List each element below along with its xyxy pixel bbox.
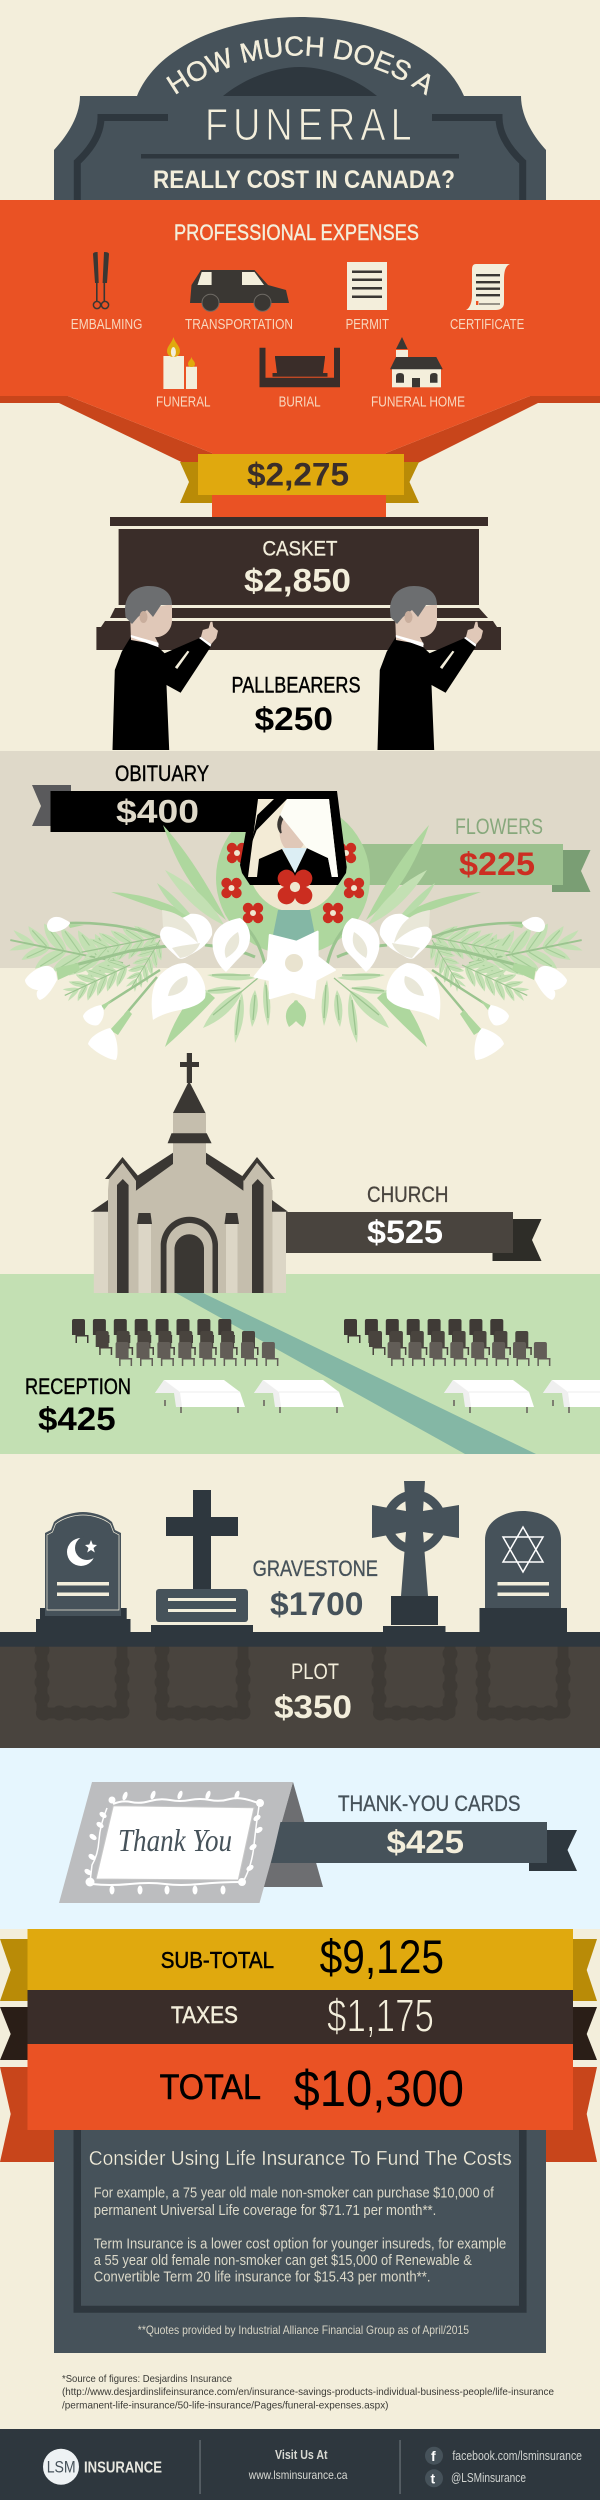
label: burial: BURIAL [279, 395, 321, 411]
side gables [105, 1157, 275, 1181]
band: total [28, 2044, 573, 2130]
paragraph: term insurance: a 55 year old female non-smoker can get $15,000 of Renewable & [94, 2253, 472, 2269]
ground [0, 1632, 600, 1647]
sign plaque [54, 17, 546, 200]
pallbearer left [112, 586, 218, 750]
paragraph: universal life: For example, a 75 year old male non-smoker can purchase $10,000 of [94, 2186, 495, 2202]
casket [96, 517, 501, 650]
label: sub-total: SUB-TOTAL [161, 1947, 274, 1973]
paragraph: term insurance: Term Insurance is a lower cost option for younger insureds, for example [94, 2236, 506, 2252]
icon: twitter: t [430, 2470, 436, 2486]
card inner panel [96, 1806, 254, 1880]
icon: candles [163, 337, 197, 389]
gravestone: star of david [480, 1511, 567, 1632]
icon: permit document [347, 262, 387, 310]
logo: LSM [47, 2458, 76, 2477]
banner body [0, 200, 600, 517]
portrait suit [257, 848, 332, 877]
ribbon: obituary [32, 761, 280, 832]
value: 2,275: $2,275 [247, 457, 349, 493]
icon: twitter [425, 2469, 443, 2487]
portrait background [248, 799, 338, 877]
bouquet left [6, 825, 306, 1060]
value: 525: $525 [367, 1214, 443, 1250]
slit windows [117, 1179, 264, 1293]
panel: thank-you cards [0, 1748, 600, 1929]
bouquet right [286, 825, 586, 1060]
tables [155, 1380, 600, 1413]
label: funeral: FUNERAL [156, 395, 210, 411]
card back [263, 1782, 323, 1887]
value: 2,850: $2,850 [244, 562, 351, 598]
heading: Consider Using Life Insurance To Fund The Costs [89, 2147, 512, 2170]
side wings [94, 1212, 108, 1293]
label: obituary: OBITUARY [115, 761, 209, 786]
portrait ribbon corner [252, 799, 287, 843]
title: how much does a: HOW MUCH DOES A [166, 36, 430, 96]
stand [271, 910, 317, 945]
red flowers upper [227, 843, 356, 863]
heading: professional expenses: PROFESSIONAL EXPENSES [174, 220, 419, 245]
title sign [54, 17, 546, 200]
portrait frame [240, 791, 347, 885]
panel: life insurance [54, 2130, 546, 2353]
plaque inner border [77, 118, 523, 200]
pallbearer right [378, 586, 483, 750]
label: reception: RECEPTION [25, 1374, 131, 1399]
visit us [248, 2447, 348, 2482]
paragraph: term insurance [94, 2236, 506, 2286]
wreath and portrait [32, 761, 370, 955]
panel: professional expenses banner [0, 200, 600, 517]
footer [0, 2429, 600, 2500]
icon: burial plot and casket [260, 348, 340, 387]
paragraph: term insurance: Convertible Term 20 life insurance for $15.43 per month**. [94, 2270, 431, 2286]
value: 1,175: $1,175 [327, 1990, 434, 2042]
path [176, 1293, 536, 1454]
paragraph: universal life [94, 2186, 495, 2219]
ribbon: professional total [180, 454, 419, 503]
label: permit: PERMIT [346, 317, 389, 333]
label: transportation: TRANSPORTATION [185, 317, 293, 333]
plaque inner arch [223, 67, 377, 96]
logo [43, 2449, 162, 2485]
church cross [180, 1053, 199, 1083]
band tails [0, 1939, 597, 2001]
label: plot: PLOT [291, 1659, 339, 1684]
quotes note: **Quotes provided by Industrial Alliance Financial Group as of April/2015 [138, 2323, 469, 2337]
source note: /permanent-life-insurance/50-life-insurance/Pages/funeral-expenses.aspx) [62, 2400, 388, 2412]
portrait veil [280, 799, 338, 877]
value: 425: $425 [386, 1824, 464, 1860]
church [91, 1053, 288, 1293]
label: pallbearers: PALLBEARERS [232, 673, 360, 698]
side columns [138, 1224, 151, 1293]
card flourishes [83, 1790, 264, 1894]
band: taxes [28, 1990, 573, 2044]
icon: funeral home [390, 337, 443, 387]
small red flowers [221, 878, 364, 923]
chairs right [344, 1319, 550, 1366]
ribbon: flowers [358, 814, 590, 892]
footer divider right [399, 2440, 401, 2494]
wreath inner [249, 820, 341, 912]
source note [62, 2373, 554, 2412]
value: 10,300: $10,300 [294, 2060, 464, 2117]
label: casket: CASKET [262, 538, 338, 561]
visit us: Visit Us At [275, 2447, 328, 2462]
dirt [0, 1646, 600, 1748]
icon: embalming scissors [93, 252, 109, 309]
band: sub-total [28, 1929, 573, 1990]
label: embalming: EMBALMING [71, 317, 142, 333]
label: thank-you cards: THANK-YOU CARDS [338, 1791, 520, 1816]
source note: (http://www.desjardinslifeinsurance.com/en/insurance-savings-products-individual-business-people/life-insurance [62, 2386, 554, 2398]
title: funeral: FUNERAL [205, 99, 412, 150]
label: taxes: TAXES [171, 2002, 238, 2029]
portrait hair [278, 815, 283, 833]
card front [59, 1782, 293, 1903]
gravestone: celtic cross [372, 1481, 459, 1632]
card script: thank you: Thank You [118, 1822, 232, 1858]
value: 400: $400 [116, 794, 199, 830]
portrait head [280, 812, 306, 852]
value: 225: $225 [459, 846, 535, 882]
icon: certificate scroll [466, 264, 510, 310]
inner frame [74, 2130, 527, 2313]
label: funeral home: FUNERAL HOME [371, 395, 465, 411]
title: really cost in canada: REALLY COST IN CANADA? [153, 166, 455, 194]
ribbon: thank-you cards [271, 1791, 577, 1871]
roof [136, 1153, 243, 1191]
twitter handle: @LSMinsurance [451, 2470, 526, 2485]
spire band [168, 1133, 212, 1143]
icon: facebook: f [431, 2448, 436, 2464]
totals [0, 1929, 597, 2162]
chairs left [72, 1319, 278, 1366]
panel: taupe band [0, 751, 600, 968]
value: 250: $250 [254, 701, 333, 737]
banner shadow [0, 396, 600, 470]
icon: hearse [190, 270, 289, 311]
portrait shirt [282, 848, 307, 873]
grave roots [42, 1647, 563, 1713]
icon: facebook [425, 2447, 443, 2465]
label: church: CHURCH [367, 1182, 448, 1207]
logo: INSURANCE [84, 2460, 162, 2477]
church door [161, 1217, 218, 1293]
gravestone: cross [151, 1490, 253, 1632]
large red flower [278, 870, 312, 904]
ribbon: church [286, 1182, 542, 1261]
label: gravestone: GRAVESTONE [253, 1556, 378, 1581]
value: 9,125: $9,125 [320, 1930, 444, 1983]
center flower [254, 932, 335, 998]
visit us: www.lsminsurance.ca [248, 2468, 348, 2482]
paragraph: universal life: permanent Universal Life coverage for $71.71 per month**. [94, 2203, 436, 2219]
church body [108, 1113, 272, 1293]
title curve line [174, 56, 427, 96]
panel: green lawn [0, 1274, 600, 1454]
label: certificate: CERTIFICATE [450, 317, 525, 333]
church spire [173, 1081, 206, 1113]
gravestone: crescent [36, 1512, 130, 1632]
wreath circle [216, 801, 370, 955]
value: 350: $350 [274, 1689, 352, 1725]
title divider [141, 154, 459, 158]
footer divider left [199, 2440, 201, 2494]
source note: *Source of figures: Desjardins Insurance [62, 2373, 232, 2385]
label: flowers: FLOWERS [455, 814, 543, 839]
value: reception 425: $425 [38, 1401, 116, 1437]
label: total: TOTAL [160, 2068, 261, 2107]
value: 1700: $1700 [270, 1586, 364, 1622]
